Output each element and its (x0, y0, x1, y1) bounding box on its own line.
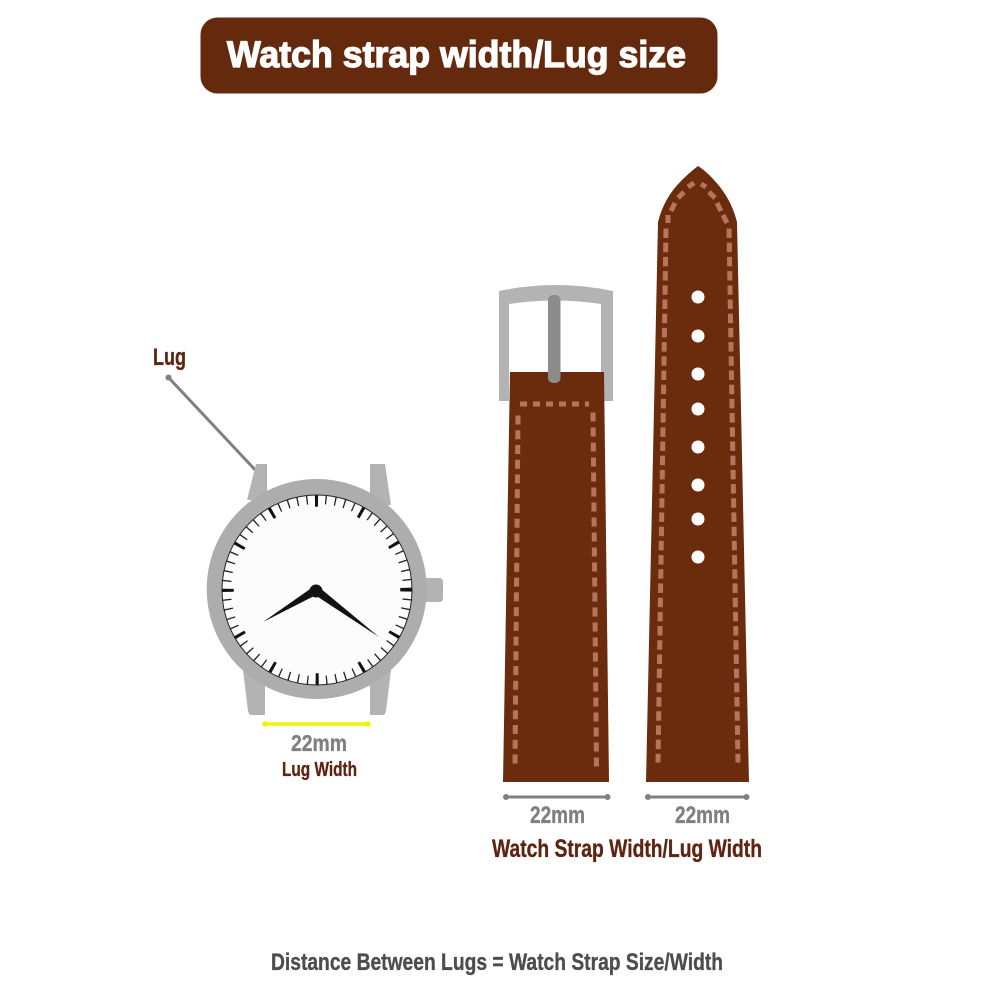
strap: buckle side (503, 295, 609, 782)
icon: lugs (243, 464, 391, 715)
footer formula: Distance Between Lugs = Watch Strap Size/Width (271, 949, 723, 976)
icon: crown (424, 578, 443, 602)
lug width marker (262, 721, 371, 727)
buckle pin (548, 295, 560, 383)
hour ticks (228, 501, 406, 679)
watch case (207, 479, 427, 699)
stitching (658, 183, 738, 762)
label: Lug: Lug (153, 344, 186, 371)
watch hands (263, 584, 379, 637)
label: 22mm right: 22mm (675, 802, 730, 829)
stitching (515, 404, 596, 766)
label: Watch Strap Width/Lug Width: Watch Strap Width/Lug Width (492, 835, 762, 863)
label: 22mm: 22mm (291, 730, 347, 756)
strap width marker: left (503, 794, 610, 800)
strap: holes side (646, 166, 749, 782)
title banner: Watch strap width/Lug size (227, 34, 686, 75)
watch illustration (207, 464, 443, 715)
title banner (200, 18, 718, 94)
strap holes (692, 290, 704, 564)
buckle (499, 285, 613, 401)
label: 22mm left: 22mm (530, 802, 585, 829)
label: Lug Width: Lug Width (282, 759, 357, 781)
arrow: lug pointer (166, 374, 259, 474)
watch dial (222, 495, 412, 685)
minute ticks (226, 500, 408, 680)
strap width marker: right (645, 794, 750, 800)
